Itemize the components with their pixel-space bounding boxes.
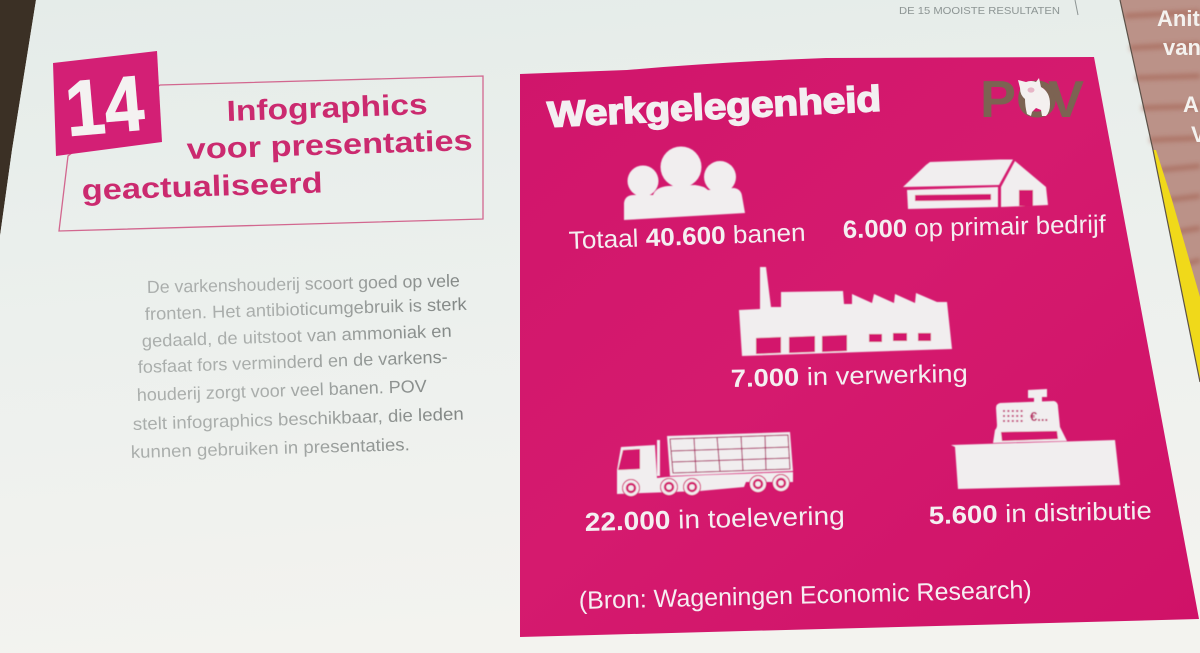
running header	[899, 0, 1078, 17]
intro text block	[131, 270, 467, 462]
label: processing: 7.000 in verwerking	[731, 360, 968, 393]
background: wooden table	[0, 0, 36, 236]
label: distribution: 5.600 in distributie	[929, 497, 1152, 530]
icon: truck	[617, 432, 793, 496]
icon: people	[624, 146, 745, 220]
item: supply	[584, 432, 845, 537]
intro text block: stelt infographics beschikbaar, die leden	[132, 404, 464, 434]
source note: (Bron: Wageningen Economic Research)	[578, 576, 1032, 615]
item: total jobs	[568, 146, 806, 255]
heading text	[81, 89, 473, 207]
icon: barn	[903, 160, 1048, 209]
running header: DE 15 MOOISTE RESULTATEN	[899, 5, 1060, 17]
label: total: Totaal 40.600 banen	[568, 219, 806, 255]
icon: cash register: €...	[1030, 409, 1048, 424]
intro text block: kunnen gebruiken in presentaties.	[131, 434, 410, 462]
heading text: Infographics	[226, 89, 428, 128]
intro text block: gedaald, de uitstoot van ammoniak en	[141, 321, 452, 351]
POV logo: O	[1016, 71, 1058, 129]
icon: pig	[1018, 78, 1050, 116]
page edge shadow	[1120, 0, 1200, 382]
POV logo: P	[980, 71, 1016, 129]
label: supply: 22.000 in toelevering	[584, 500, 845, 537]
heading block: number 14 with title	[53, 51, 483, 231]
icon: factory	[739, 267, 952, 356]
background: next page with brick photo	[1120, 0, 1200, 382]
intro text block: houderij zorgt voor veel banen. POV	[136, 376, 427, 405]
item: primary farms	[843, 160, 1106, 244]
panel background	[520, 57, 1199, 637]
yellow page edge	[1153, 150, 1200, 382]
number badge	[53, 51, 162, 156]
next page text fragments: Anit	[1157, 6, 1200, 31]
heading frame	[59, 76, 483, 231]
icon: cash register	[951, 389, 1120, 489]
panel: Werkgelegenheid	[520, 57, 1199, 637]
POV logo: V	[1048, 71, 1084, 129]
intro text block: fosfaat fors verminderd en de varkens-	[137, 347, 448, 377]
next page text fragments: van	[1163, 35, 1200, 60]
label: primary: 6.000 op primair bedrijf	[843, 210, 1106, 244]
panel title: Werkgelegenheid	[546, 78, 882, 135]
next page text fragments	[1157, 6, 1200, 147]
item: distribution	[929, 389, 1152, 530]
item: processing	[731, 267, 968, 393]
heading text: geactualiseerd	[81, 167, 323, 207]
intro text block: fronten. Het antibioticumgebruik is sterk	[144, 294, 467, 324]
POV logo	[980, 71, 1084, 129]
number 14: 14	[62, 58, 147, 153]
intro text block: De varkenshouderij scoort goed op vele	[147, 270, 460, 297]
heading text: voor presentaties	[186, 125, 473, 166]
